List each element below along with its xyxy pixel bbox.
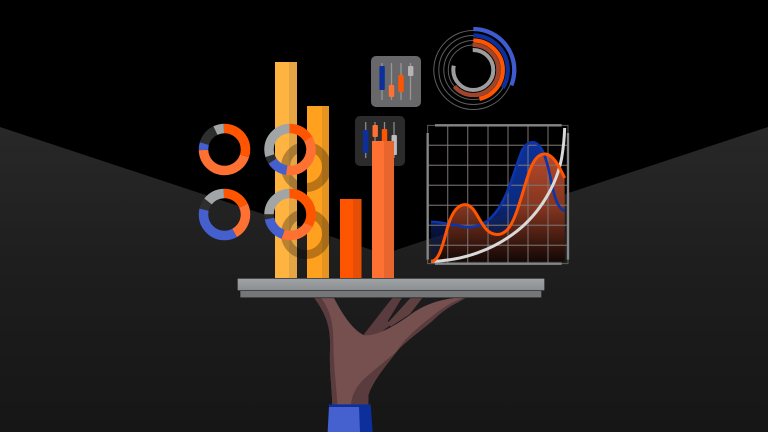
chart grid xyxy=(428,125,568,264)
bar chart xyxy=(275,62,394,278)
background: dark floor shape xyxy=(0,127,768,432)
palm and front finger xyxy=(313,297,468,405)
candlestick panel: lower xyxy=(355,116,405,166)
line: blue series xyxy=(431,142,565,227)
line and area chart xyxy=(428,125,568,264)
donut shadows on bars xyxy=(286,146,326,254)
donut chart: bottom right xyxy=(269,194,311,236)
chart frame highlights xyxy=(428,125,568,264)
sleeve cuff xyxy=(328,404,373,432)
line: white series xyxy=(431,128,565,261)
area: blue series xyxy=(431,142,565,261)
tray underside xyxy=(240,290,542,298)
radial progress chart xyxy=(432,29,514,111)
donut chart: top right xyxy=(269,128,311,170)
donut chart: bottom left xyxy=(204,194,246,236)
palm shading xyxy=(313,297,468,405)
area: orange series xyxy=(431,154,565,261)
candlestick panel: upper xyxy=(371,56,421,107)
bar 2 xyxy=(307,106,329,278)
bar 3 xyxy=(340,199,362,278)
back fingers xyxy=(363,297,423,337)
donut chart: top left xyxy=(204,128,246,170)
line: orange series xyxy=(431,154,565,261)
hand and sleeve xyxy=(313,297,468,432)
bar 4 xyxy=(372,141,394,278)
serving tray xyxy=(237,278,545,298)
bar 1 xyxy=(275,62,297,278)
tray top xyxy=(237,278,545,291)
